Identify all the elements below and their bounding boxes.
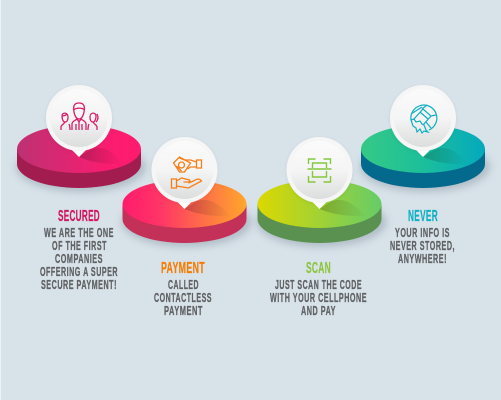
text block: never: ANYWHERE! [398,252,447,266]
heading: never: NEVER [408,208,438,225]
pin: payment [152,137,218,209]
text block: secured: OF THE FIRST [52,239,107,253]
text block: secured [40,208,118,292]
text block: scan: WITH YOUR CELLPHONE [270,291,367,305]
panel: never disc [360,125,490,192]
pin: never [390,85,456,157]
text block: secured: COMPANIES [55,252,103,266]
panel: scan disc [256,180,386,247]
text block: never: NEVER STORED, [390,239,455,253]
icon: shredded globe [411,105,437,133]
text block: payment: CALLED [168,278,199,292]
text block: scan [270,260,367,318]
text block: payment [154,260,212,318]
text block: scan: JUST SCAN THE CODE [275,278,362,292]
icon: scan frame [308,159,332,182]
text block: secured: WE ARE THE ONE [44,226,114,240]
icon: hands exchanging money [172,157,202,188]
pin: scan [286,137,352,209]
text block: never: YOUR INFO IS [395,226,450,240]
text block: never [390,208,455,266]
heading: scan: SCAN [306,260,331,277]
text block: payment: PAYMENT [164,304,203,318]
panel: secured disc [16,125,146,192]
panel: payment disc [122,180,252,247]
icon: people [61,103,98,130]
heading: secured: SECURED [58,208,100,225]
heading: payment: PAYMENT [161,260,205,277]
pin: secured [46,85,112,157]
text block: secured: SECURE PAYMENT! [41,278,117,292]
text block: scan: AND PAY [301,304,336,318]
text block: payment: CONTACTLESS [154,291,212,305]
text block: secured: OFFERING A SUPER [40,265,118,279]
